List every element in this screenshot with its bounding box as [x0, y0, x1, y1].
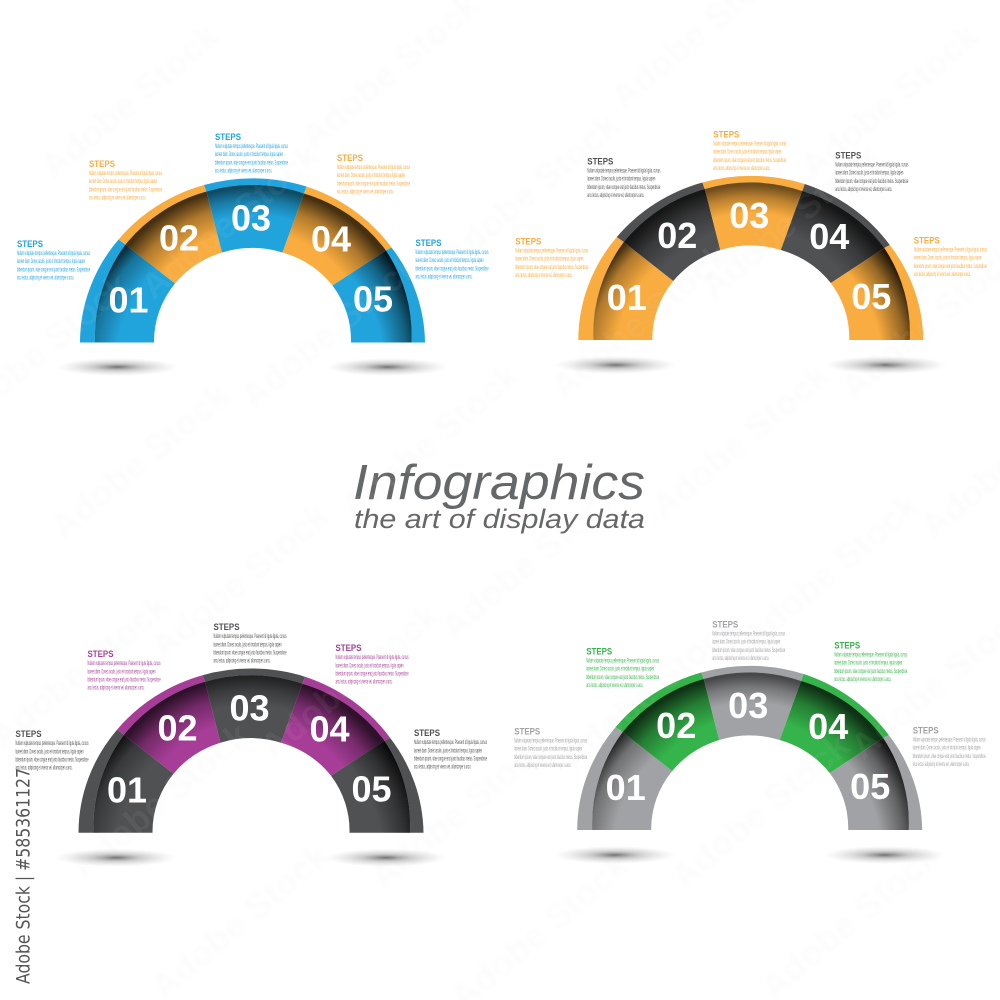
chart: orange and dark grey semicircle: arcu lectus, adipiscing et viverra vel, ullamcorper a arcu. — [515, 273, 572, 279]
chart: orange and dark grey semicircle: Nullam vulputate tempus pellentesque. Praesent id ligula ligula, cursus — [713, 142, 786, 148]
segment 02: 02 — [159, 218, 199, 258]
text block 03: STEPS — [214, 622, 240, 632]
segment 01 — [80, 240, 175, 342]
chart: blue and orange semicircle — [17, 132, 489, 376]
text: laoreet diam. Donec iaculis, justo et tincidunt tempus, ligula sapien — [416, 258, 484, 264]
segment 03 — [204, 178, 306, 252]
chart: orange and dark grey semicircle: laoreet diam. Donec iaculis, justo et tincidunt tempus, ligula sapien — [587, 177, 655, 183]
chart: orange and dark grey semicircle: Nullam vulputate tempus pellentesque. Praesent id ligula ligula, cursus — [515, 248, 588, 254]
watermark pattern: Adobe Stock — [332, 354, 527, 527]
segment 02: 02 — [157, 708, 198, 749]
chart: blue and orange semicircle: Nullam vulputate tempus pellentesque. Praesent id ligula ligula, cursus — [215, 144, 288, 150]
chart: blue and orange semicircle: laoreet diam. Donec iaculis, justo et tincidunt tempus, ligula sapien — [337, 173, 405, 179]
text block 04: STEPS — [336, 643, 362, 653]
chart: grey and green semicircle: arcu lectus, adipiscing et viverra vel, ullamcorper a arcu. — [514, 763, 571, 769]
watermark pattern: Adobe Stock — [62, 714, 257, 887]
chart: orange and dark grey semicircle: bibendum ipsum, vitae congue erat justo faucibus metus. Suspendisse — [515, 265, 589, 271]
chart: dark grey and purple semicircle: Nullam vulputate tempus pellentesque. Praesent id ligula ligula, cursus — [88, 661, 160, 667]
segment 05 — [831, 245, 923, 340]
chart: grey and green semicircle: bibendum ipsum, vitae congue erat justo faucibus metus. Suspendisse — [514, 755, 587, 761]
text: Nullam vulputate tempus pellentesque. Praesent id ligula ligula, cursus — [414, 740, 487, 746]
watermark pattern: Adobe Stock — [542, 234, 737, 407]
chart: orange and dark grey semicircle: arcu lectus, adipiscing et viverra vel, ullamcorper a arcu. — [587, 193, 644, 199]
segment 03 — [202, 669, 305, 743]
segment 05 — [331, 738, 424, 833]
chart: orange and dark grey semicircle — [515, 130, 987, 374]
watermark pattern: Adobe Stock — [142, 494, 337, 667]
segment 05: 05 — [851, 276, 891, 317]
segment 03: 03 — [229, 688, 270, 729]
chart: grey and green semicircle: arcu lectus, adipiscing et viverra vel, ullamcorper a arcu. — [586, 683, 643, 689]
text block 05 — [414, 728, 487, 771]
segment 05 — [830, 735, 922, 830]
segment 03: 03 — [728, 685, 768, 726]
chart: dark grey and purple semicircle: laoreet diam. Donec iaculis, justo et tincidunt tempus, ligula sapien — [214, 642, 282, 648]
chart: blue and orange semicircle: laoreet diam. Donec iaculis, justo et tincidunt tempus, ligula sapien — [215, 152, 283, 158]
segment 05: 05 — [353, 278, 393, 320]
segment 04 — [282, 186, 392, 286]
chart: orange and dark grey semicircle: Nullam vulputate tempus pellentesque. Praesent id ligula ligula, cursus — [587, 168, 660, 174]
chart: blue and orange semicircle: arcu lectus, adipiscing et viverra vel, ullamcorper a arcu. — [17, 276, 74, 282]
chart: orange and dark grey semicircle: laoreet diam. Donec iaculis, justo et tincidunt tempus, ligula sapien — [713, 150, 781, 156]
segment 02 — [617, 182, 720, 281]
segment 04 — [781, 184, 890, 283]
chart: orange and dark grey semicircle: laoreet diam. Donec iaculis, justo et tincidunt tempus, ligula sapien — [515, 257, 583, 263]
text block 05: STEPS — [914, 236, 940, 246]
chart: blue and orange semicircle: bibendum ipsum, vitae congue erat justo faucibus metus. Suspendisse — [17, 267, 90, 273]
chart: grey and green semicircle: bibendum ipsum, vitae congue erat justo faucibus metus. Suspendisse — [712, 648, 785, 654]
text block 01: STEPS — [515, 236, 541, 246]
chart: dark grey and purple semicircle: arcu lectus, adipiscing et viverra vel, ullamcorper a arcu. — [336, 680, 393, 686]
title: the art of display data — [354, 504, 645, 534]
text block 05 — [914, 236, 987, 278]
text block 01: STEPS — [17, 239, 43, 249]
chart: grey and green semicircle: laoreet diam. Donec iaculis, justo et tincidunt tempus, ligula sapien — [586, 667, 654, 673]
segment 03 — [702, 176, 805, 250]
watermark pattern: Adobe Stock — [232, 244, 427, 417]
segment 04: 04 — [809, 216, 849, 257]
watermark pattern: Adobe Stock — [432, 474, 627, 647]
segment 01 — [78, 730, 174, 833]
text block 03 — [214, 622, 287, 665]
watermark pattern: Adobe Stock — [642, 354, 837, 527]
text: bibendum ipsum, vitae congue erat justo faucibus metus. Suspendisse — [414, 757, 487, 763]
segment 01: 01 — [107, 770, 147, 811]
watermark pattern: Adobe Stock — [552, 604, 747, 777]
text block 03: STEPS — [712, 620, 738, 630]
title — [353, 456, 645, 534]
watermark pattern: Adobe Stock — [32, 14, 227, 187]
stock id label: Adobe Stock | #585361127 — [12, 768, 34, 984]
chart: dark grey and purple semicircle: arcu lectus, adipiscing et viverra vel, ullamcorper a arcu. — [16, 766, 73, 772]
chart: blue and orange semicircle: bibendum ipsum, vitae congue erat justo faucibus metus. Suspendisse — [89, 187, 162, 193]
text block 03 — [215, 132, 288, 174]
segment 04: 04 — [311, 218, 351, 260]
text block 01 — [16, 729, 89, 772]
chart: dark grey and purple semicircle: Nullam vulputate tempus pellentesque. Praesent id ligula ligula, cursus — [214, 634, 286, 640]
text block 05 — [913, 726, 986, 768]
chart: dark grey and purple semicircle: bibendum ipsum, vitae congue erat justo faucibus metus. Suspendisse — [16, 758, 89, 764]
chart: orange and dark grey semicircle: arcu lectus, adipiscing et viverra vel, ullamcorper a arcu. — [835, 187, 892, 193]
chart: dark grey and purple semicircle: Nullam vulputate tempus pellentesque. Praesent id ligula ligula, cursus — [336, 655, 408, 661]
segment 02: 02 — [657, 215, 697, 256]
text block 02: STEPS — [587, 156, 613, 166]
chart: blue and orange semicircle: arcu lectus, adipiscing et viverra vel, ullamcorper a arcu. — [89, 196, 146, 202]
segment 04 — [281, 677, 390, 776]
segment 04: 04 — [309, 709, 350, 750]
text block 04: STEPS — [337, 153, 363, 163]
segment 02 — [117, 675, 220, 774]
chart: blue and orange semicircle: laoreet diam. Donec iaculis, justo et tincidunt tempus, ligula sapien — [17, 259, 85, 265]
floor shadows — [554, 846, 946, 864]
text block 04 — [835, 150, 909, 193]
text block 02 — [587, 156, 661, 199]
chart: dark grey and purple semicircle: Nullam vulputate tempus pellentesque. Praesent id ligula ligula, cursus — [16, 741, 88, 747]
text block 03 — [713, 130, 787, 172]
text block 05: STEPS — [913, 726, 939, 736]
watermark pattern: Adobe Stock — [252, 594, 447, 767]
chart: grey and green semicircle: laoreet diam. Donec iaculis, justo et tincidunt tempus, ligula sapien — [712, 640, 780, 646]
chart: dark grey and purple semicircle — [16, 622, 487, 867]
chart: blue and orange semicircle: Nullam vulputate tempus pellentesque. Praesent id ligula ligula, cursus — [337, 165, 410, 171]
text block 02 — [586, 646, 659, 689]
chart: grey and green semicircle: bibendum ipsum, vitae congue erat justo faucibus metus. Suspendisse — [586, 675, 659, 681]
chart: grey and green semicircle: arcu lectus, adipiscing et viverra vel, ullamcorper a arcu. — [834, 677, 891, 683]
floor shadows — [555, 356, 947, 374]
text block 04: STEPS — [834, 640, 860, 650]
watermark pattern: Adobe Stock — [662, 724, 857, 897]
chart: dark grey and purple semicircle: laoreet diam. Donec iaculis, justo et tincidunt tempus, ligula sapien — [336, 663, 404, 669]
text block 01: STEPS — [514, 726, 540, 736]
text: laoreet diam. Donec iaculis, justo et tincidunt tempus, ligula sapien — [414, 748, 482, 754]
watermark pattern: Adobe Stock — [432, 104, 627, 277]
segment 04: 04 — [808, 706, 848, 747]
text block 05 — [416, 238, 489, 280]
watermark pattern: Adobe Stock — [732, 484, 927, 657]
segment 01 — [578, 237, 673, 340]
text block 03: STEPS — [215, 132, 241, 142]
segment 05 — [332, 248, 425, 342]
chart: grey and green semicircle: Nullam vulputate tempus pellentesque. Praesent id ligula ligula, cursus — [514, 738, 587, 744]
chart: dark grey and purple semicircle: arcu lectus, adipiscing et viverra vel, ullamcorper a arcu. — [88, 686, 145, 692]
watermark pattern: Adobe Stock — [792, 14, 987, 187]
segment 01: 01 — [108, 280, 149, 320]
text block 04 — [336, 643, 409, 686]
chart: grey and green semicircle: laoreet diam. Donec iaculis, justo et tincidunt tempus, ligula sapien — [514, 747, 582, 753]
chart: dark grey and purple semicircle: arcu lectus, adipiscing et viverra vel, ullamcorper a arcu. — [214, 659, 271, 665]
text block 03: STEPS — [713, 130, 739, 140]
text block 02: STEPS — [89, 159, 115, 169]
segment 03 — [701, 666, 804, 740]
text block 04 — [337, 153, 410, 196]
segment 02 — [616, 672, 719, 771]
segment 03: 03 — [729, 195, 769, 236]
segment 02: 02 — [656, 705, 696, 746]
chart: blue and orange semicircle: arcu lectus, adipiscing et viverra vel, ullamcorper a arcu. — [337, 190, 394, 196]
text block 05: STEPS — [416, 238, 442, 248]
text block 05: STEPS — [414, 728, 440, 738]
chart: dark grey and purple semicircle: bibendum ipsum, vitae congue erat justo faucibus metus. Suspendisse — [336, 672, 409, 678]
text block 02: STEPS — [586, 646, 612, 656]
chart: grey and green semicircle: Nullam vulputate tempus pellentesque. Praesent id ligula ligula, cursus — [712, 632, 785, 638]
segment 02 — [118, 185, 222, 284]
text block 03 — [712, 620, 785, 662]
watermark pattern: Adobe Stock — [692, 134, 887, 307]
chart: grey and green semicircle: arcu lectus, adipiscing et viverra vel, ullamcorper a arcu. — [712, 656, 769, 662]
text: bibendum ipsum, vitae congue erat justo faucibus metus. Suspendisse — [416, 266, 489, 272]
text block 04: STEPS — [835, 150, 861, 160]
text block 04 — [834, 640, 907, 683]
text block 01: STEPS — [16, 729, 42, 739]
text block 01 — [17, 239, 90, 282]
text block 02 — [88, 649, 161, 692]
text: arcu lectus, adipiscing et viverra vel, ullamcorper a arcu. — [416, 274, 473, 280]
chart: blue and orange semicircle: laoreet diam. Donec iaculis, justo et tincidunt tempus, ligula sapien — [89, 179, 157, 185]
segment 01: 01 — [606, 767, 646, 808]
text block 02: STEPS — [88, 649, 114, 659]
chart: dark grey and purple semicircle: laoreet diam. Donec iaculis, justo et tincidunt tempus, ligula sapien — [88, 669, 156, 675]
chart: blue and orange semicircle: bibendum ipsum, vitae congue erat justo faucibus metus. Suspendisse — [337, 181, 410, 187]
segment 04 — [780, 674, 889, 773]
watermark pattern: Adobe Stock — [362, 724, 557, 897]
text: arcu lectus, adipiscing et viverra vel, ullamcorper a arcu. — [414, 765, 471, 771]
title: Infographics — [353, 456, 645, 510]
segment 01 — [577, 727, 672, 830]
watermark pattern: Adobe Stock — [42, 374, 237, 547]
chart: blue and orange semicircle: Nullam vulputate tempus pellentesque. Praesent id ligula ligula, cursus — [17, 251, 90, 257]
chart: blue and orange semicircle: Nullam vulputate tempus pellentesque. Praesent id ligula ligula, cursus — [89, 171, 162, 177]
chart: dark grey and purple semicircle: laoreet diam. Donec iaculis, justo et tincidunt tempus, ligula sapien — [16, 749, 84, 755]
chart: blue and orange semicircle: arcu lectus, adipiscing et viverra vel, ullamcorper a arcu. — [215, 168, 272, 174]
chart: dark grey and purple semicircle: bibendum ipsum, vitae congue erat justo faucibus metus. Suspendisse — [88, 678, 161, 684]
segment 05: 05 — [351, 769, 392, 810]
chart: dark grey and purple semicircle: bibendum ipsum, vitae congue erat justo faucibus metus. Suspendisse — [214, 651, 287, 657]
chart: orange and dark grey semicircle: arcu lectus, adipiscing et viverra vel, ullamcorper a arcu. — [713, 166, 770, 172]
floor shadows — [56, 358, 448, 376]
segment 05: 05 — [850, 766, 890, 807]
chart: grey and green semicircle: Nullam vulputate tempus pellentesque. Praesent id ligula ligula, cursus — [586, 658, 659, 664]
floor shadows — [55, 849, 447, 867]
chart: grey and green semicircle — [514, 620, 986, 864]
chart: orange and dark grey semicircle: bibendum ipsum, vitae congue erat justo faucibus metus. Suspendisse — [587, 185, 661, 191]
text: Nullam vulputate tempus pellentesque. Praesent id ligula ligula, cursus — [416, 250, 488, 256]
text block 01 — [514, 726, 587, 769]
segment 01: 01 — [607, 277, 647, 318]
chart: orange and dark grey semicircle: bibendum ipsum, vitae congue erat justo faucibus metus. Suspendisse — [713, 158, 787, 164]
chart: blue and orange semicircle: bibendum ipsum, vitae congue erat justo faucibus metus. Suspendisse — [215, 160, 288, 166]
text block 02 — [89, 159, 162, 202]
watermark pattern: Adobe Stock — [132, 134, 327, 307]
text block 01 — [515, 236, 589, 279]
segment 03: 03 — [231, 198, 271, 238]
